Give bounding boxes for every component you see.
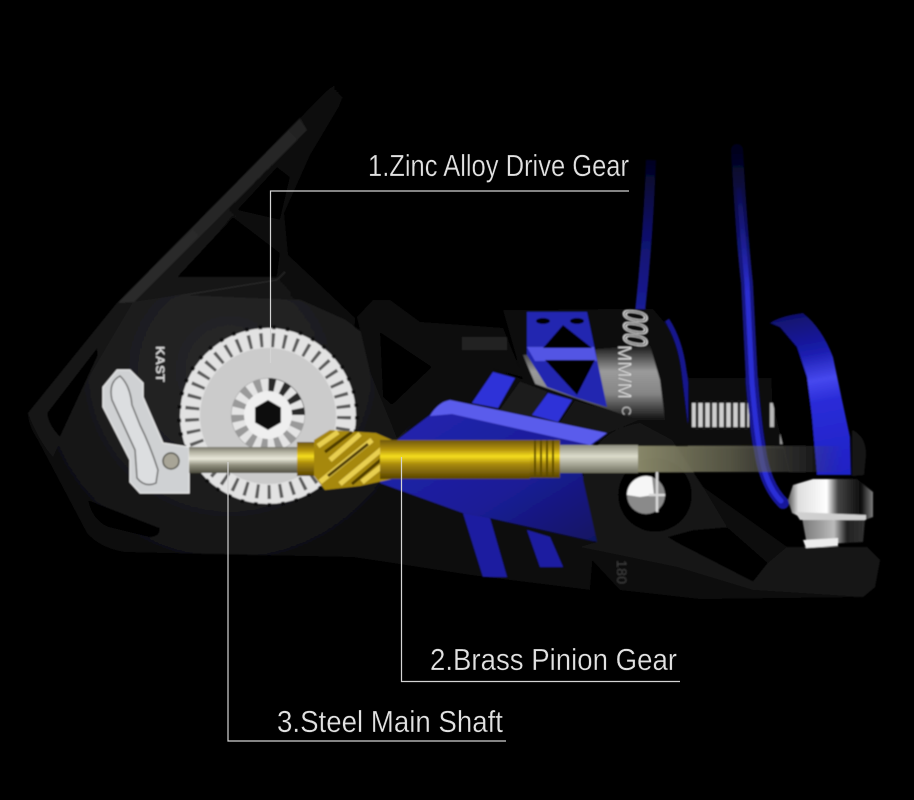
label 2: 2.Brass Pinion Gear [430,642,677,677]
rear bail wire [640,160,651,312]
bail ring [770,313,866,476]
label 3: 3.Steel Main Shaft [277,704,503,739]
steel main shaft [189,447,299,473]
zinc bracket [103,370,189,493]
inner pinion teeth [231,378,305,452]
front bail wire [737,150,783,503]
spool capacity mark: C [619,406,634,415]
line roller knob [788,479,873,548]
callout 3: steel main shaft [228,462,506,741]
callout 1: zinc alloy drive gear [270,148,629,363]
reel illustration [28,60,880,599]
rotor arm and foot [580,423,880,599]
brass pinion gear [297,430,560,490]
translucent shaft extension [638,446,843,472]
spool unit text: MM/M [613,345,634,399]
spool [503,307,692,445]
threaded spool shaft [688,378,818,448]
drive gear [179,327,357,505]
blue body panel [380,372,638,577]
steel shaft end [560,445,638,473]
pinion side frame [357,300,638,438]
rotor screw [627,472,665,514]
label 1: 1.Zinc Alloy Drive Gear [368,148,629,183]
rear frame arm [117,60,364,400]
gearbox body [28,295,600,590]
callout 2: brass pinion gear [402,457,680,682]
logo on body: KAST [153,346,167,383]
small mark 180: 180 [614,560,630,584]
spool size text: 000 [616,307,653,349]
